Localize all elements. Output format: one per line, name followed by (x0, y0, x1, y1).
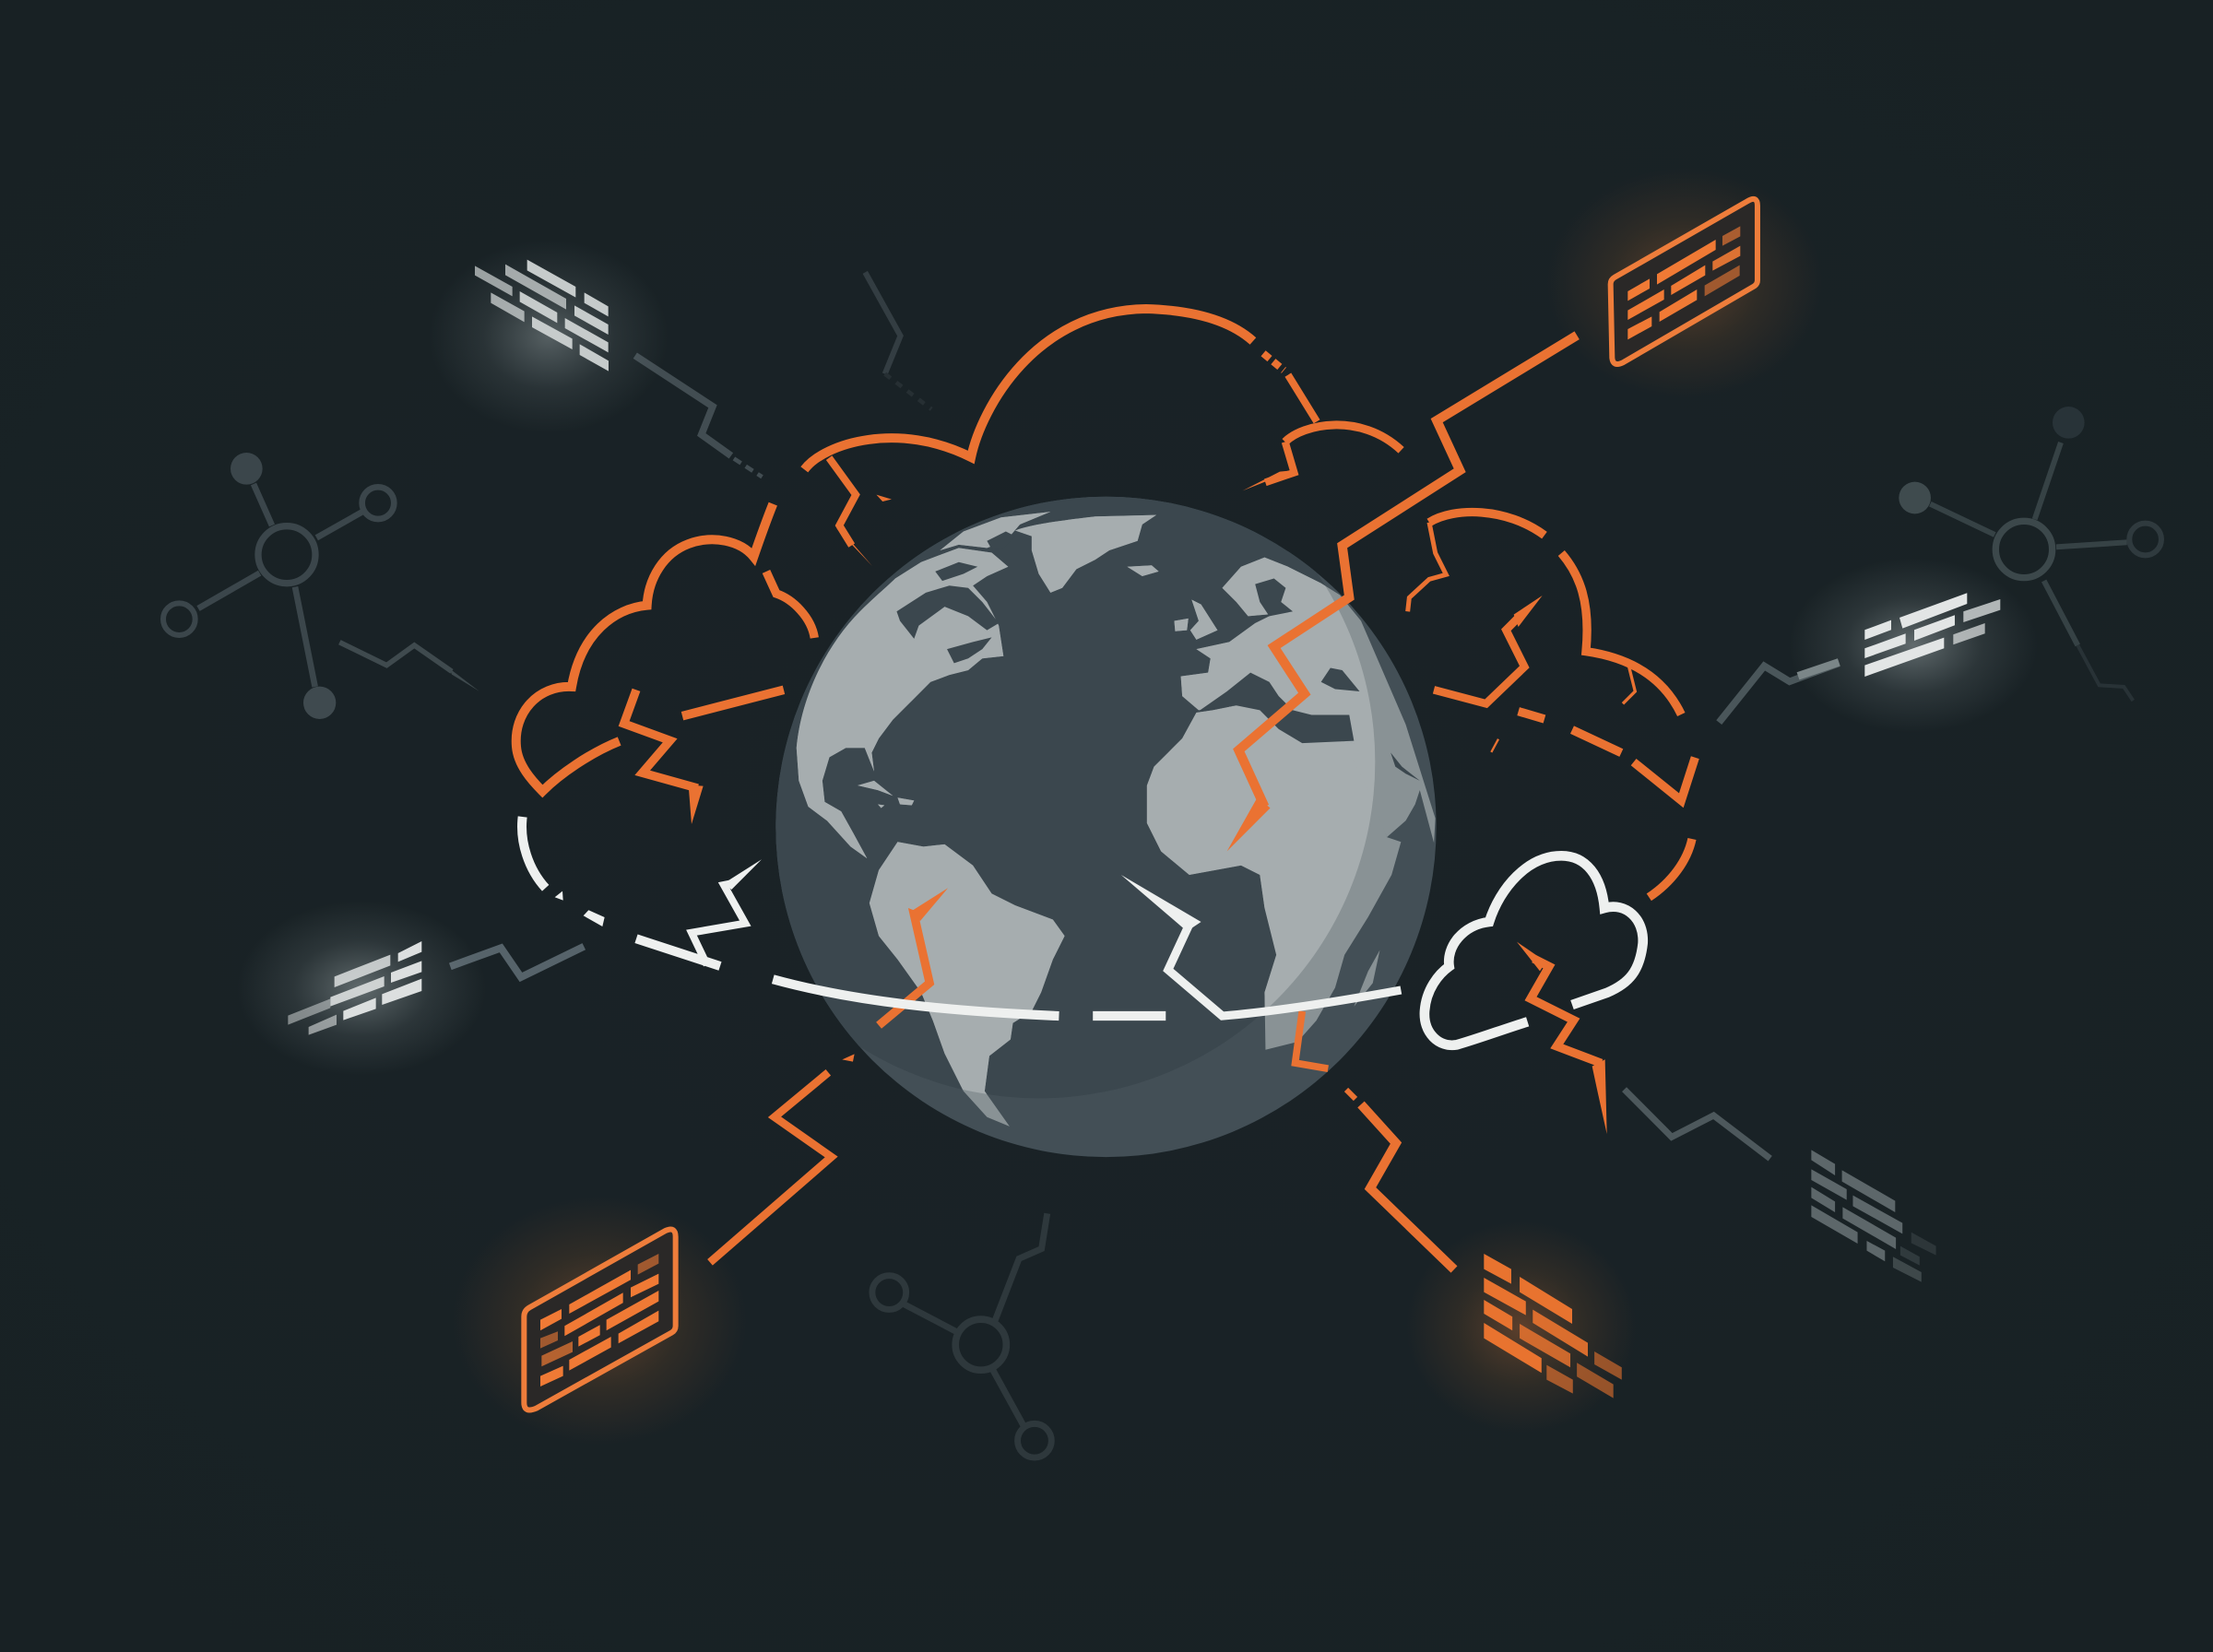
globe sphere (775, 497, 1437, 1157)
network hub: left (163, 453, 394, 719)
data block: top-left white (429, 240, 669, 433)
globe lit ocean (859, 573, 1324, 1098)
top orange cloud (804, 309, 1402, 566)
connector: lower-right (1625, 1090, 1770, 1159)
orange panel: bottom left (452, 1197, 747, 1446)
connector: lower-left (450, 947, 584, 977)
data block: right white (1789, 558, 2038, 733)
lit landmasses (797, 512, 1376, 1094)
small white cloud (1425, 856, 1643, 1045)
globe (775, 496, 1437, 1158)
grey zigzag connectors (635, 272, 1839, 723)
left orange cloud (516, 504, 814, 824)
bottom-right bolt (1346, 1090, 1454, 1269)
seas and bays (896, 532, 1420, 781)
network hub: right (1899, 407, 2161, 701)
bolt across South America (879, 888, 948, 1025)
network hub: bottom (872, 1213, 1051, 1457)
bottom-left bolt (710, 1054, 855, 1262)
shaded landmasses (797, 512, 1436, 1127)
data block: lower-left white (237, 901, 486, 1076)
left dashed white cloud (522, 817, 762, 966)
data block: lower-centre orange (1406, 1221, 1637, 1434)
orange panel: top right (1546, 168, 1823, 398)
white network arc (773, 875, 1401, 1016)
long top-right bolt (1227, 336, 1577, 851)
bolt under white cloud (1517, 942, 1607, 1134)
data block: lower-right grey (1811, 1150, 1936, 1282)
zigzag: left (339, 643, 479, 691)
right orange cloud (1408, 513, 1695, 897)
connector stub: right (1798, 662, 1839, 676)
bolt across southern Africa (1296, 1011, 1328, 1068)
